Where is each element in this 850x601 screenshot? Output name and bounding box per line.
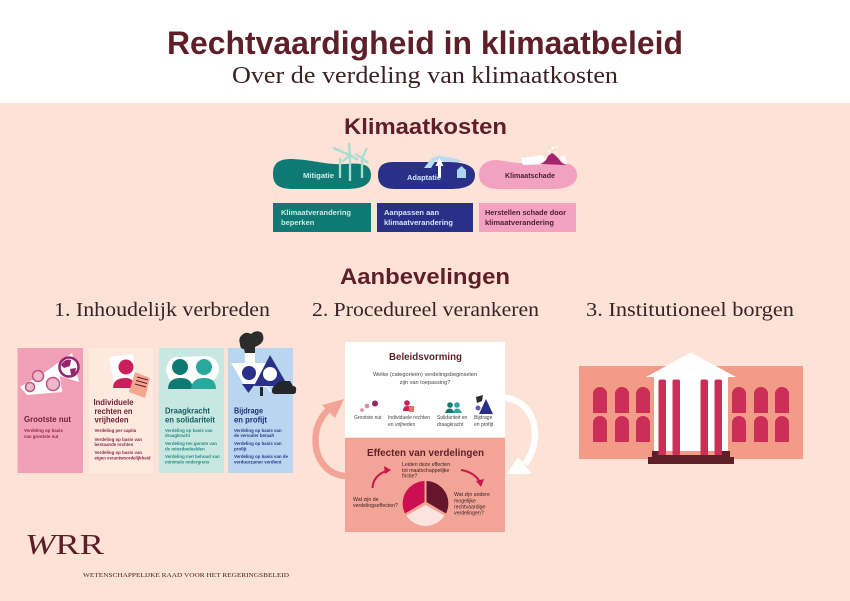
text: andere verdelingen	[454, 492, 490, 516]
blob: klimaatschade	[479, 160, 577, 189]
card text	[234, 428, 288, 464]
card text: Verdeling op basis van	[234, 428, 282, 433]
icon labels: draagkracht	[437, 422, 464, 428]
arrow: left curved	[372, 466, 391, 488]
icon labels: Grootste nut	[354, 415, 382, 421]
text: verdelingseffecten: Wat zijn de	[353, 497, 379, 503]
blob: adaptatie	[378, 162, 475, 189]
card title: vrijheden	[94, 416, 128, 424]
panel: mitigatie	[273, 143, 371, 232]
text: andere verdelingen: rechtvaardige	[454, 504, 486, 510]
arrow: right curved	[461, 470, 484, 487]
icon: coins and globe	[20, 353, 79, 395]
card text	[165, 428, 220, 464]
card text	[94, 428, 151, 460]
arrow: white cycle arrow	[504, 398, 535, 474]
card text: Verdeling op basis van	[234, 441, 282, 446]
card title: Draagkracht	[165, 406, 210, 416]
card text: profijt	[234, 446, 247, 452]
icon labels: en vrijheden	[388, 422, 415, 428]
pie chart	[403, 481, 448, 526]
subtitle: Over de verdeling van klimaatkosten	[232, 63, 618, 89]
steps	[648, 451, 734, 464]
heading: Klimaatkosten: Klimaatkosten	[344, 114, 507, 139]
card title: Individuele	[94, 398, 134, 407]
text: andere verdelingen: verdelingen?	[454, 510, 484, 516]
icon labels: en profijt	[474, 422, 494, 428]
panel: klimaatschade	[479, 146, 577, 232]
heading: 2. Procedureel verankeren: 2. Procedureel verankeren	[312, 299, 539, 321]
card text: bestaande rechten	[94, 442, 134, 447]
card title: Grootste nut	[24, 414, 71, 424]
box: herstellen schade	[479, 203, 576, 232]
card title: en solidariteit	[165, 414, 215, 424]
card text: Verdeling per capita	[94, 428, 137, 433]
card text: Verdeling op basis van de	[234, 454, 288, 459]
icon: person and document	[109, 354, 150, 398]
label: Adaptatie: Adaptatie	[407, 173, 441, 182]
card text: de vervuiler betaalt	[234, 433, 275, 438]
heading: Aanbevelingen: Aanbevelingen	[340, 264, 510, 289]
card text: Verdeling op basis	[24, 428, 63, 433]
card: individuele rechten en vrijheden	[89, 348, 153, 473]
heading: Beleidsvorming: Beleidsvorming	[389, 352, 462, 363]
windows	[593, 387, 789, 442]
label: Mitigatie: Mitigatie	[303, 171, 334, 180]
portico	[646, 352, 736, 451]
icon: individuele rechten	[403, 400, 414, 412]
box: klimaatverandering beperken: beperken	[281, 218, 315, 227]
card title: en profijt	[234, 414, 267, 424]
blob: mitigatie	[273, 159, 371, 189]
box: aanpassen aan klimaatverandering	[377, 203, 473, 232]
text: andere verdelingen: mogelijke	[454, 498, 476, 504]
box: aanpassen aan klimaatverandering: Aanpassen aan	[384, 208, 439, 217]
columns	[658, 380, 722, 456]
card: draagkracht en solidariteit	[159, 348, 224, 473]
card title: rechten en	[94, 407, 132, 416]
card text: eigen verantwoordelijkheid	[94, 456, 151, 460]
text: maatschappelijke frictie: Leiden deze effecten	[402, 462, 450, 468]
icon: two people	[166, 356, 219, 389]
icon: grootste nut	[360, 400, 378, 412]
icon: dike and water	[410, 156, 463, 168]
card text: Verdeling op basis van	[94, 450, 142, 455]
box: aanpassen aan klimaatverandering: klimaatverandering	[384, 218, 453, 227]
box: klimaatverandering beperken	[273, 203, 371, 232]
text: maatschappelijke frictie: tot maatschappelijke	[402, 468, 449, 474]
card text: Verdeling op basis van	[94, 437, 142, 442]
card text: verduurzamer verdient	[234, 460, 282, 464]
card title	[234, 406, 267, 424]
heading: 1. Inhoudelijk verbreden: 1. Inhoudelijk verbreden	[54, 299, 270, 321]
card text: Verdeling op basis van	[165, 428, 213, 433]
icon labels: Solidariteit en	[437, 415, 468, 421]
card title	[94, 398, 134, 424]
card text: draagkracht	[165, 433, 191, 438]
icon labels: Individuele rechten	[388, 415, 430, 421]
card: grootste nut	[18, 348, 83, 473]
text: verdelingseffecten	[353, 497, 398, 509]
arrow: salmon cycle arrow	[316, 399, 346, 476]
text: andere verdelingen: Wat zijn andere	[454, 492, 490, 498]
label: Klimaatschade: Klimaatschade	[505, 171, 555, 180]
icon labels: Bijdrage	[474, 415, 493, 421]
card: bijdrage en profijt	[228, 331, 296, 473]
icon: damage	[521, 146, 567, 165]
panel: adaptatie	[377, 156, 475, 232]
heading: 3. Institutioneel borgen: 3. Institutioneel borgen	[586, 299, 794, 321]
card text: van grootste nut	[24, 434, 59, 439]
card text	[24, 428, 63, 439]
icon: bijdrage	[476, 395, 493, 414]
icon: house and arrow	[436, 158, 466, 178]
icon labels	[354, 415, 494, 428]
header band	[0, 0, 850, 103]
logo: WRR: WRR	[25, 529, 105, 561]
text: maatschappelijke frictie	[402, 462, 450, 480]
question text: zijn van toepassing?	[400, 380, 450, 386]
card text: minimale ondergrens	[165, 460, 210, 464]
title: Rechtvaardigheid in klimaatbeleid	[167, 25, 683, 61]
card text: Verdeling met behoud van	[165, 454, 220, 459]
icon: smoke, triangles and car	[231, 331, 296, 396]
panel: beleidsvorming	[345, 342, 505, 437]
question text	[373, 372, 477, 386]
question text: Welke (categorieën) verdelingsbeginselen	[373, 372, 477, 378]
box: klimaatverandering beperken: Klimaatverandering	[281, 208, 351, 217]
card title	[165, 406, 215, 424]
icon: draagkracht	[445, 402, 462, 413]
card text: de minstbedeelden	[165, 446, 205, 452]
card text: Verdeling ten gunste van	[165, 441, 217, 446]
box: herstellen schade: Herstellen schade door	[485, 208, 566, 217]
building wings	[579, 366, 803, 459]
logo tagline: WETENSCHAPPELIJKE RAAD VOOR HET REGERINGSBELEID	[83, 572, 290, 579]
building illustration	[579, 352, 803, 464]
panel: effecten van verdelingen	[345, 438, 505, 532]
heading: Effecten van verdelingen: Effecten van verdelingen	[367, 448, 484, 459]
card title: Bijdrage	[234, 406, 263, 416]
box: herstellen schade: klimaatverandering	[485, 218, 554, 227]
icon: wind turbines	[333, 143, 368, 181]
text: maatschappelijke frictie: frictie?	[402, 474, 417, 480]
text: verdelingseffecten: verdelingseffecten?	[353, 503, 398, 509]
